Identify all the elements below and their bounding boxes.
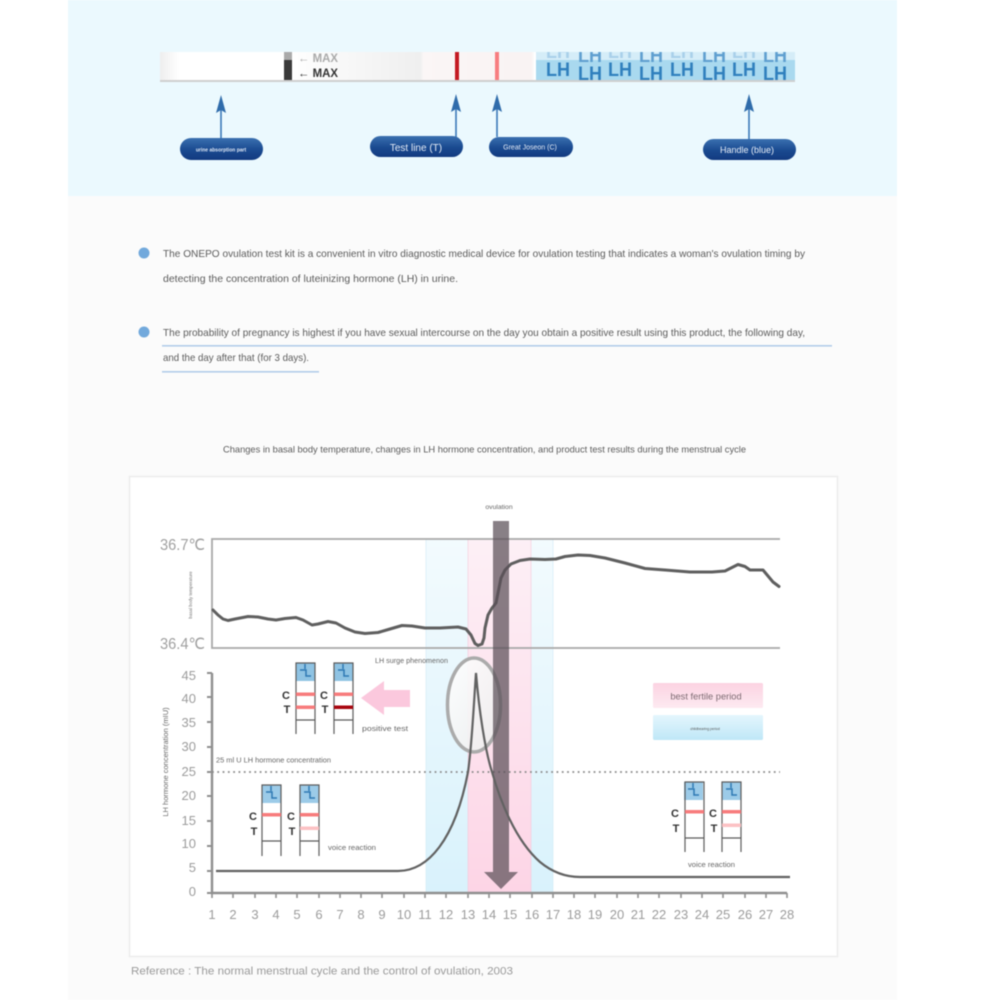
x axis labels: 1 xyxy=(208,907,216,922)
paragraph 2: The probability of pregnancy is highest if you have sexual intercourse on the day you obtain a positive result using this product, the following day, xyxy=(163,327,805,339)
paragraph 2: and the day after that (for 3 days). xyxy=(163,352,309,364)
x axis labels: 6 xyxy=(315,907,323,922)
test strip: ← MAX xyxy=(298,51,338,65)
test strip: LH xyxy=(546,60,570,81)
faint reaction strips: low phase: T xyxy=(251,826,258,838)
test strip: LH xyxy=(670,42,694,63)
faint reaction strips: late phase: C xyxy=(671,808,679,820)
x axis labels: 3 xyxy=(251,907,259,922)
test strip: LH xyxy=(608,42,632,63)
x axis labels: 11 xyxy=(418,907,432,922)
bullet 2 xyxy=(138,326,150,338)
x axis labels: 15 xyxy=(503,907,517,922)
x axis labels: 18 xyxy=(567,907,581,922)
chart heading: Changes in basal body temperature, changes in LH hormone concentration, and product test results during the menstrual cycle xyxy=(223,444,746,456)
faint reaction strips: low phase xyxy=(249,785,319,856)
callout: test line xyxy=(370,94,463,157)
callout: urine absorption part: urine absorption part xyxy=(196,148,246,154)
x axis labels: 5 xyxy=(293,907,301,922)
positive test strips xyxy=(282,663,353,734)
x axis labels: 21 xyxy=(631,907,645,922)
y axis labels: 35 xyxy=(182,715,196,730)
x axis labels: 23 xyxy=(674,907,688,922)
y axis labels: 40 xyxy=(182,691,196,706)
test strip: LH xyxy=(763,46,787,67)
x axis labels: 13 xyxy=(461,907,475,922)
y axis labels: 0 xyxy=(189,884,196,899)
faint reaction strips: late phase: C xyxy=(709,808,717,820)
voice reaction label: right: voice reaction xyxy=(688,862,735,869)
ovulation arrow xyxy=(484,521,518,889)
x axis labels: 14 xyxy=(482,907,496,922)
pink arrow xyxy=(361,681,410,715)
test strip: LH xyxy=(732,42,756,63)
temperature scale labels: 36.7℃ xyxy=(160,537,205,554)
x axis labels: 12 xyxy=(439,907,453,922)
LH hormone curve xyxy=(216,673,790,877)
basal temperature curve xyxy=(213,555,779,646)
test strip: LH xyxy=(732,60,756,81)
legend: best fertile period xyxy=(670,692,742,702)
positive test strips: C xyxy=(282,690,290,702)
band: childbearing period xyxy=(426,539,553,893)
callout: urine absorption part xyxy=(180,95,263,160)
y axis labels: 10 xyxy=(182,836,196,851)
y axis title: LH hormone concentration (mIU) xyxy=(161,707,170,817)
voice reaction label: left: voice reaction xyxy=(328,845,376,852)
test strip: ← MAX xyxy=(298,66,338,80)
threshold label: 25 ml U LH hormone concentration xyxy=(216,756,331,764)
positive test strips: T xyxy=(322,704,329,716)
test strip: LH xyxy=(608,60,632,81)
y axis labels: 5 xyxy=(189,860,196,875)
paragraph 1: The ONEPO ovulation test kit is a convenient in vitro diagnostic medical device for ovulation testing that indicates a woman's ovulation timing by xyxy=(163,248,806,260)
temperature scale labels xyxy=(160,537,205,653)
x axis labels: 2 xyxy=(229,907,237,922)
x axis labels: 22 xyxy=(652,907,666,922)
faint reaction strips: late phase: T xyxy=(673,823,680,835)
x axis labels: 9 xyxy=(378,907,386,922)
x axis labels: 25 xyxy=(716,907,730,922)
y axis labels: 15 xyxy=(182,813,196,828)
callout: control line: Great Joseon (C) xyxy=(503,144,557,152)
LH surge label: LH surge phenomenon xyxy=(375,658,448,665)
test strip: LH xyxy=(670,60,694,81)
faint reaction strips: low phase: T xyxy=(289,826,296,838)
y axis labels xyxy=(182,668,196,899)
y axis labels: 25 xyxy=(182,764,196,779)
callout: handle xyxy=(703,94,796,160)
test strip: LH xyxy=(763,64,787,85)
x axis labels: 19 xyxy=(588,907,602,922)
x axis labels: 4 xyxy=(272,907,280,922)
x axis labels: 20 xyxy=(610,907,624,922)
reference citation: Reference : The normal menstrual cycle and the control of ovulation, 2003 xyxy=(131,966,513,978)
callout: control line xyxy=(489,94,573,157)
faint reaction strips: low phase: C xyxy=(249,811,257,823)
x axis labels: 8 xyxy=(357,907,365,922)
paragraph 1 xyxy=(163,248,806,285)
x axis labels: 26 xyxy=(738,907,752,922)
panel: test strip diagram xyxy=(68,0,897,196)
positive test label: positive test xyxy=(362,724,409,733)
legend xyxy=(653,683,763,740)
test strip: LH xyxy=(702,64,726,85)
LH axes xyxy=(207,673,787,898)
text block: description xyxy=(138,248,832,373)
positive test strips: C xyxy=(320,690,328,702)
temperature scale labels: 36.4℃ xyxy=(160,636,205,653)
callout: handle: Handle (blue) xyxy=(720,145,774,155)
panel: cycle chart xyxy=(130,476,838,956)
paragraph 2 xyxy=(162,327,832,373)
faint reaction strips: late phase: T xyxy=(711,823,718,835)
ovulation label: ovulation xyxy=(485,504,513,511)
x axis labels: 10 xyxy=(397,907,411,922)
x axis labels: 7 xyxy=(336,907,344,922)
test strip: LH xyxy=(639,64,663,85)
positive test strips: T xyxy=(284,704,291,716)
y axis labels: 20 xyxy=(182,788,196,803)
legend: childbearing period xyxy=(690,727,720,731)
test strip: LH xyxy=(639,46,663,67)
x axis labels: 17 xyxy=(546,907,560,922)
test strip: LH xyxy=(578,46,602,67)
paragraph 1: detecting the concentration of luteinizing hormone (LH) in urine. xyxy=(163,273,458,285)
band: best fertile period xyxy=(468,539,531,893)
threshold line: 25 mIU xyxy=(212,771,780,773)
y axis labels: 45 xyxy=(182,668,196,683)
x axis labels: 24 xyxy=(695,907,709,922)
LH surge ellipse xyxy=(448,658,500,752)
x axis labels: 28 xyxy=(780,907,794,922)
bullet 1 xyxy=(138,248,150,258)
test strip xyxy=(160,51,796,82)
y axis labels: 30 xyxy=(182,739,196,754)
x axis labels: 27 xyxy=(759,907,773,922)
x axis labels xyxy=(208,907,794,922)
callout: test line: Test line (T) xyxy=(390,143,442,154)
faint reaction strips: late phase xyxy=(671,782,741,852)
temperature chart frame xyxy=(212,539,780,648)
test strip: LH xyxy=(578,64,602,85)
x axis labels: 16 xyxy=(525,907,539,922)
temperature axis title: basal body temperature xyxy=(188,571,193,619)
test strip: LH xyxy=(702,46,726,67)
test strip: LH xyxy=(546,42,570,63)
faint reaction strips: low phase: C xyxy=(287,811,295,823)
